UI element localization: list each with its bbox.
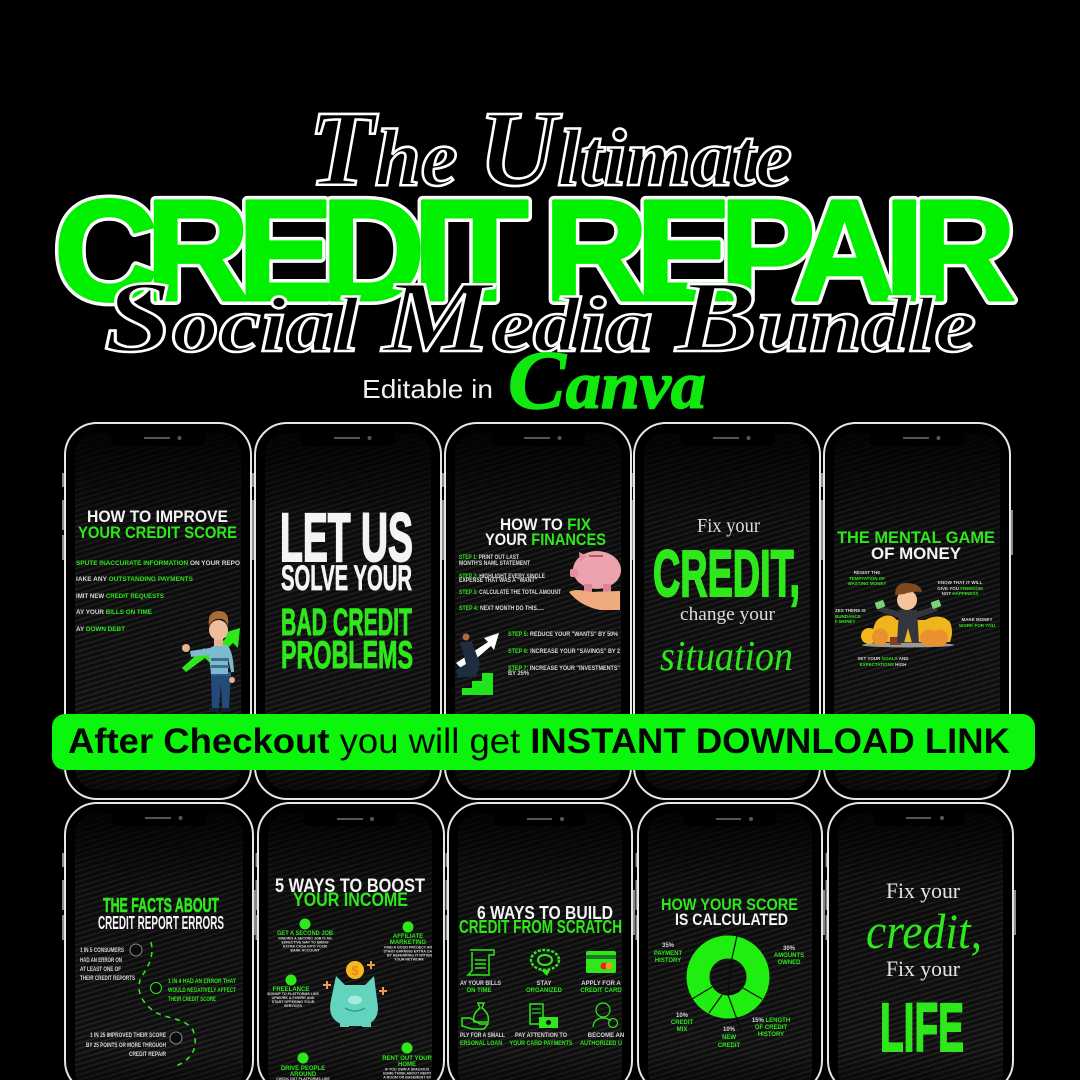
phone: how your score is calculated: NEW: [722, 1035, 736, 1041]
phone: 5 ways to boost your income: UPWORK & FIVERR AND: [272, 996, 315, 1000]
phone: 6 ways to build credit from scratch: PAY ATTENTION TO: [515, 1033, 567, 1039]
phone: the facts about credit report errors: 1 IN 4 HAD AN ERROR THAT: [168, 979, 236, 985]
phone: how to improve your credit score: HOW TO IMPROVE: [87, 507, 228, 526]
title: The Ultimate: The Ultimate: [308, 90, 792, 209]
icon: credit card: [586, 951, 616, 973]
phone: the facts about credit report errors: THEIR CREDIT SCORE: [168, 997, 216, 1003]
phone: the facts about credit report errors: BY 25 POINTS OR MORE THROUGH: [86, 1043, 166, 1049]
chart: dashed timeline with markers: [130, 942, 195, 1066]
title: Social Media Bundle: Social Media Bundle: [104, 261, 976, 374]
phone: fix your credit change your situation: [632, 423, 823, 799]
icon: hand with money bag: [462, 1003, 488, 1029]
phone: the mental game of money: ZES THERE IS: [835, 608, 866, 613]
phone: how to fix your finances: EXPENSE THAT WAS A "WANT": [459, 578, 537, 584]
phone: how to fix your finances: STEP 2: HIGHLIGHT EVERY SINGLE: [459, 574, 545, 580]
phone: 5 ways to boost your income: START OFFERING YOUR: [272, 1000, 315, 1004]
icon: teal piggy bank with coin: $: [351, 963, 359, 978]
phone: how to improve your credit score: IMIT NEW CREDIT REQUESTS: [76, 594, 164, 600]
phone: the mental game of money: WASTING MONEY: [848, 581, 886, 586]
phone: how your score is calculated: 15% LENGTH: [752, 1018, 790, 1024]
phone: 5 ways to boost your income: FREELANCE: [273, 987, 309, 993]
phone: 6 ways to build credit from scratch: 6 WAYS TO BUILD: [477, 903, 613, 923]
phone: fix your credit change your situation: situation: [660, 634, 793, 680]
phone: how to improve your credit score: AY DOWN DEBT: [76, 627, 125, 633]
phone: 5 ways to boost your income: FIND A GOOD PROJECT AN: [384, 946, 432, 950]
phone: how to fix your finances: STEP 7: INCREASE YOUR "INVESTMENTS": [508, 666, 620, 672]
phone: fix your credit fix your life: Fix your: [886, 956, 961, 981]
phone: the mental game of money: MAKE MONEY: [961, 617, 993, 622]
phone: 6 ways to build credit from scratch: BECOME AN: [588, 1033, 624, 1039]
phone: the facts about credit report errors: [62, 803, 256, 1080]
phone: how your score is calculated: HISTORY: [655, 958, 681, 964]
phone: 5 ways to boost your income: A ROOM OR BASEMENT WI: [383, 1076, 431, 1080]
phone: 6 ways to build credit from scratch: CREDIT CARD: [580, 988, 622, 994]
phone: how to fix your finances: STEP 3: CALCULATE THE TOTAL AMOUNT: [459, 590, 561, 596]
phone: how to improve your credit score: YOUR CREDIT SCORE: [78, 523, 237, 542]
phone: the facts about credit report errors: THEIR CREDIT REPORTS: [80, 976, 135, 982]
phone: how to fix your finances: MONTH'S NAML STATEMENT: [459, 561, 530, 567]
phone: the mental game of money: GIVE YOU FREEDOM: [937, 586, 983, 591]
phone: how your score is calculated: [636, 803, 825, 1080]
phone: 5 ways to boost your income: YOUR NETWORK: [394, 958, 424, 962]
phone: how your score is calculated: OF CREDIT: [755, 1025, 787, 1031]
phone: the facts about credit report errors: AT LEAST ONE OF: [80, 967, 121, 973]
phone: the facts about credit report errors: WOULD NEGATIVELY AFFECT: [168, 988, 236, 994]
phone: 6 ways to build credit from scratch: AUTHORIZED U: [580, 1041, 622, 1047]
phone: 5 ways to boost your income: [256, 803, 444, 1080]
phone: the facts about credit report errors: 1 IN 5 CONSUMERS: [80, 948, 124, 954]
phone: fix your credit fix your life: credit,: [866, 903, 982, 959]
title: CREDIT REPAIR: CREDIT REPAIR: [54, 170, 1016, 331]
phone: how to fix your finances: STEP 4: NEXT MONTH DO THIS.....: [459, 606, 544, 612]
icon: man carrying arrow up stairs: [456, 633, 499, 695]
icon: piggy bank on hand: [569, 551, 621, 610]
phone: how to fix your finances: YOUR FINANCES: [485, 530, 606, 549]
phone: 5 ways to boost your income: FINDING A SECOND JOB IS AN: [278, 936, 332, 940]
phone: 6 ways to build credit from scratch: PLY FOR A SMALL: [460, 1033, 505, 1039]
phone: let us solve your bad credit problems: BAD CREDIT: [281, 602, 412, 644]
phone: 6 ways to build credit from scratch: APPLY FOR A: [581, 981, 621, 987]
subtitle: Canva: Canva: [508, 334, 706, 427]
phone: the facts about credit report errors: CREDIT REPORT ERRORS: [98, 913, 224, 933]
phone: how your score is calculated: 10%: [723, 1027, 736, 1033]
phone: how your score is calculated: HOW YOUR SCORE: [661, 895, 798, 914]
phone: the mental game of money: KNOW THAT IT WILL: [938, 580, 983, 585]
icon: person with check badge: [593, 1003, 618, 1028]
phone: 5 ways to boost your income: BANK ACCOUNT: [290, 948, 320, 952]
phone: how to improve your credit score: SPUTE INACCURATE INFORMATION ON YOUR REPO: [76, 561, 240, 567]
phone: how to fix your finances: HOW TO FIX: [500, 515, 592, 534]
phone: how to improve your credit score: IAKE ANY OUTSTANDING PAYMENTS: [76, 577, 193, 583]
phone: how to fix your finances: STEP 1: PRINT OUT LAST: [459, 555, 519, 561]
phone: the mental game of money: THE MENTAL GAME: [837, 528, 995, 547]
subtitle: Editable in: Editable in: [362, 374, 493, 404]
phone: 5 ways to boost your income: 5 WAYS TO BOOST: [275, 876, 425, 897]
phone: how your score is calculated: OWNED: [778, 960, 801, 966]
phone: 5 ways to boost your income: DRIVE PEOPLE: [281, 1066, 325, 1072]
phone: fix your credit change your situation: change your: [680, 604, 776, 625]
phone: let us solve your bad credit problems: PROBLEMS: [281, 634, 413, 677]
title: CREDIT REPAIR: CREDIT REPAIR: [54, 170, 1016, 331]
phone: 5 ways to boost your income: IF YOU OWN A SPACIOUS: [385, 1068, 430, 1072]
phone: how your score is calculated: 10%: [676, 1013, 689, 1019]
phone: how your score is calculated: MIX: [677, 1027, 687, 1033]
phone: 5 ways to boost your income: RENT OUT YOUR: [382, 1056, 432, 1062]
phone: the mental game of money: EXPECTATIONS HIGH: [860, 662, 906, 667]
banner: after checkout: After Checkout you will get INSTANT DOWNLOAD LINK: [68, 722, 1010, 761]
phone: the mental game of money: OF MONEY: [871, 544, 962, 563]
phone: the mental game of money: RESIST THE: [854, 570, 880, 575]
phone: the mental game of money: BUNDANCE: [835, 614, 861, 619]
phone: 6 ways to build credit from scratch: AY YOUR BILLS: [460, 981, 501, 987]
icon: teal piggy bank with coin: [323, 961, 387, 1027]
icon: brain: [531, 950, 559, 976]
phone: 5 ways to boost your income: START EARNING EXTRA CA: [383, 950, 432, 954]
phone: 5 ways to boost your income: EFFECTIVE WAY TO BRING: [281, 940, 329, 944]
phone: the mental game of money: NOT HAPPINESS: [942, 591, 978, 596]
chart: credit score donut: [692, 936, 762, 1033]
phone: let us solve your bad credit problems: [252, 423, 444, 799]
phone: how your score is calculated: AMOUNTS: [774, 953, 804, 959]
phone: 5 ways to boost your income: HOME: [398, 1062, 416, 1068]
phone: the facts about credit report errors: THE FACTS ABOUT: [103, 895, 219, 917]
icon: document and banknotes: [530, 1004, 558, 1028]
icon: bill: [468, 950, 494, 975]
phone: how to improve your credit score: AY YOUR BILLS ON TIME: [76, 610, 152, 616]
phone: fix your credit fix your life: LIFE: [880, 989, 964, 1066]
phone: how your score is calculated: 35%: [662, 943, 675, 949]
phone: 5 ways to boost your income: YOUR INCOME: [293, 890, 408, 911]
icon: man with rising arrow: [182, 611, 240, 712]
phone: 5 ways to boost your income: SIGNUP TO PLATFORMS LIKE: [267, 992, 320, 996]
phone: the facts about credit report errors: HAD AN ERROR ON: [80, 958, 122, 964]
phone: 6 ways to build credit from scratch: ORGANIZED: [526, 988, 563, 994]
phone: fix your credit fix your life: Fix your: [886, 878, 961, 903]
phone: the mental game of money: [821, 423, 1013, 799]
phone: 5 ways to boost your income: HOME THINK ABOUT RENTI: [383, 1072, 431, 1076]
phone: how your score is calculated: 30%: [783, 946, 796, 952]
phone: fix your credit change your situation: CREDIT,: [653, 536, 800, 610]
phone: how to improve your credit score: [62, 423, 254, 799]
phone: 6 ways to build credit from scratch: CREDIT FROM SCRATCH: [459, 917, 622, 937]
phone: how your score is calculated: PAYMENT: [654, 951, 683, 957]
phone: how to fix your finances: BY 25%: [508, 671, 530, 677]
phone: how your score is calculated: IS CALCULATED: [675, 910, 788, 929]
phone: the mental game of money: TEMPTATION OF: [849, 576, 885, 581]
phone: 5 ways to boost your income: BY REFERRING IT WITHIN: [387, 954, 432, 958]
phone: how to fix your finances: STEP 6: INCREASE YOUR "SAVINGS" BY 2: [508, 649, 621, 655]
phone: how your score is calculated: HISTORY: [758, 1032, 784, 1038]
phone: 6 ways to build credit from scratch: ERSONAL LOAN: [460, 1041, 502, 1047]
phone: how to fix your finances: [442, 423, 634, 799]
phone: the facts about credit report errors: CREDIT REPAIR: [129, 1052, 167, 1058]
phone: 5 ways to boost your income: AROUND: [290, 1072, 317, 1078]
phone: how your score is calculated: CREDIT: [718, 1043, 740, 1049]
phone: the mental game of money: SET YOUR GOALS AND: [857, 656, 909, 661]
phone: 5 ways to boost your income: EXTRA CASH INTO YOUR: [283, 944, 327, 948]
phone: 6 ways to build credit from scratch: YOUR CARD PAYMENTS: [510, 1041, 572, 1047]
phone: how your score is calculated: CREDIT: [671, 1020, 693, 1026]
phone: the facts about credit report errors: 1 IN 25 IMPROVED THEIR SCORE: [90, 1033, 166, 1039]
phone: how to fix your finances: STEP 5: REDUCE YOUR "WANTS" BY 50%: [508, 632, 619, 638]
phone: the mental game of money: WORK FOR YOU: [959, 623, 995, 628]
phone: let us solve your bad credit problems: LET US: [280, 499, 413, 576]
phone: 5 ways to boost your income: SERVICES: [284, 1004, 303, 1008]
phone: 5 ways to boost your income: MARKETING: [390, 940, 426, 946]
phone: the mental game of money: F MONEY: [835, 619, 856, 624]
phone: fix your credit change your situation: Fix your: [697, 515, 760, 537]
phone: 6 ways to build credit from scratch: ON TIME: [466, 988, 492, 994]
icon: businessman with money bags: [861, 583, 954, 648]
banner: after checkout: [52, 714, 1035, 770]
phone: 5 ways to boost your income: GET A SECOND JOB: [277, 931, 334, 937]
phone: 6 ways to build credit from scratch: STAY: [536, 981, 552, 987]
phone: 5 ways to boost your income: AFFILIATE: [393, 934, 423, 940]
phone: 6 ways to build credit from scratch: [446, 803, 635, 1080]
phone: let us solve your bad credit problems: SOLVE YOUR: [281, 559, 412, 598]
phone: fix your credit fix your life: [826, 803, 1016, 1080]
